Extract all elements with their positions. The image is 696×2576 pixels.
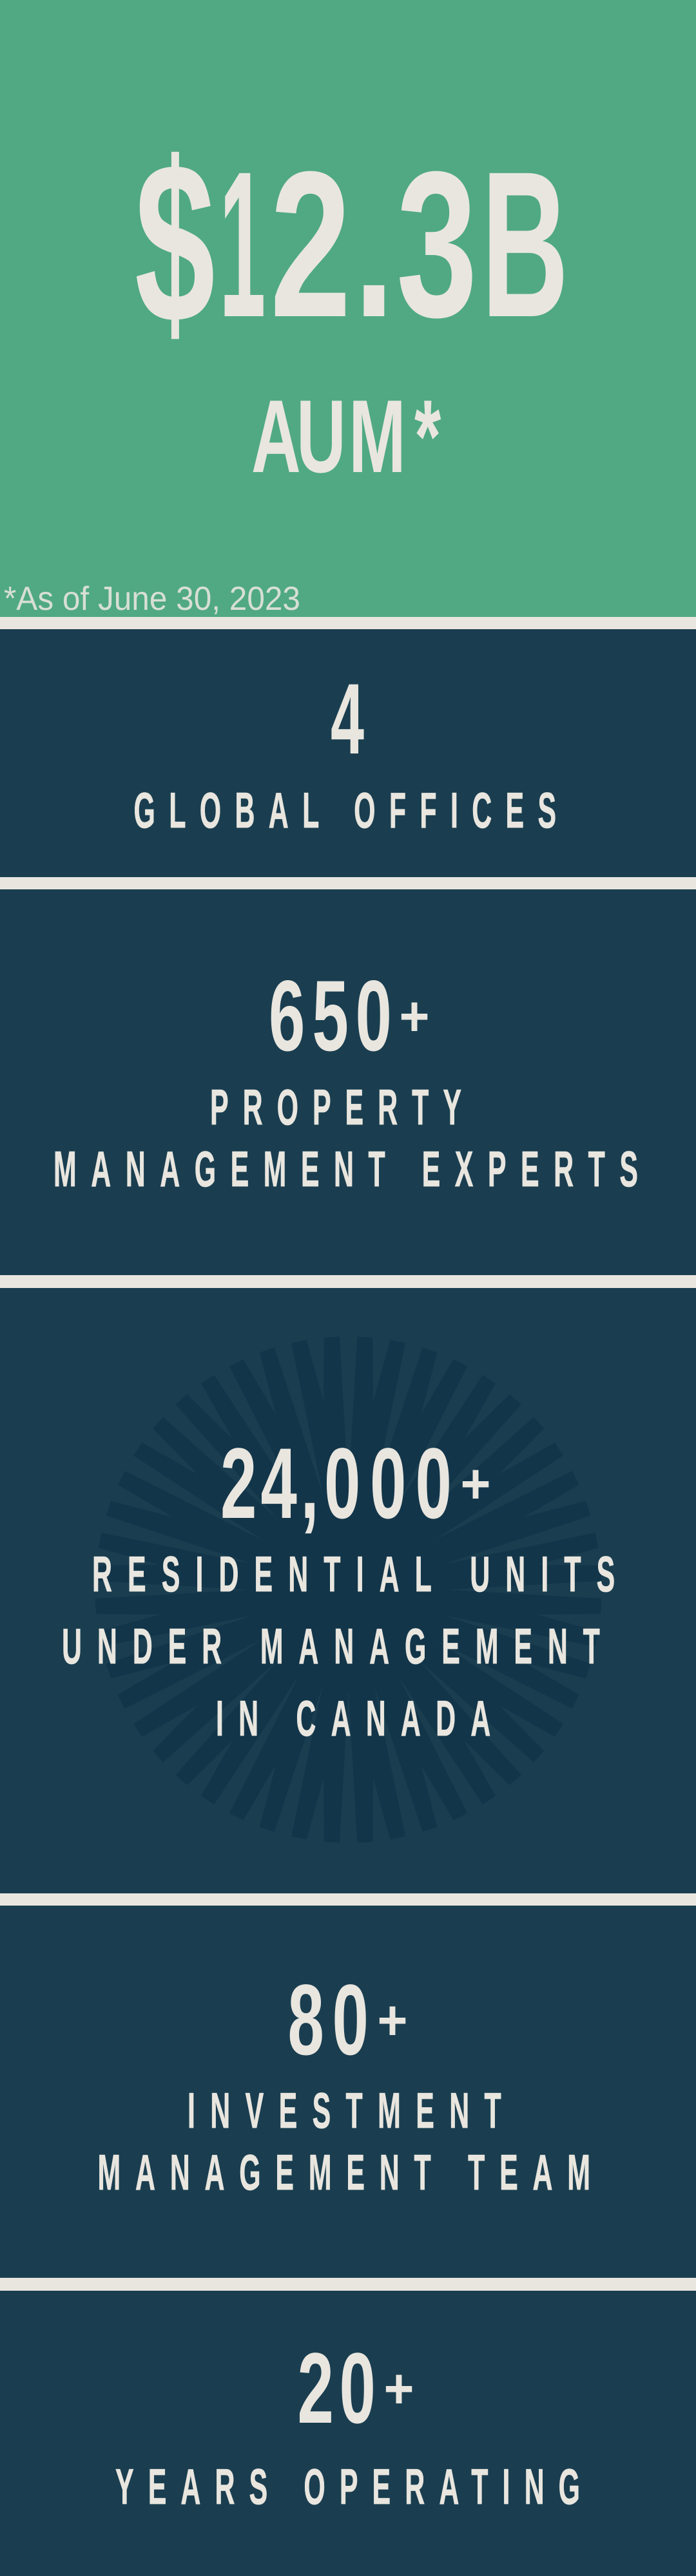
AUM label: AUM* bbox=[251, 379, 441, 494]
label: property management experts bbox=[53, 1080, 638, 1197]
headline figure: 1 bbox=[219, 128, 266, 361]
headline figure bbox=[135, 115, 568, 372]
figure: 20+ bbox=[298, 2332, 414, 2444]
panel: property management experts bbox=[0, 889, 696, 1275]
panel: global offices bbox=[0, 629, 696, 877]
label: residential units under management in Canada: IN CANADA bbox=[216, 1691, 490, 1747]
label: investment management team: MANAGEMENT TEAM bbox=[98, 2145, 590, 2201]
panel: investment management team bbox=[0, 1906, 696, 2278]
label: property management experts: PROPERTY bbox=[210, 1080, 461, 1135]
headline figure: B bbox=[481, 128, 568, 361]
footnote: *As of June 30, 2023 bbox=[4, 580, 300, 618]
panel: AUM bbox=[0, 0, 696, 618]
headline figure: 2.3 bbox=[270, 129, 478, 361]
icon: sunburst bbox=[94, 1336, 603, 1844]
label: investment management team: INVESTMENT bbox=[188, 2083, 501, 2139]
headline figure: $ bbox=[135, 115, 215, 372]
figure: 650+: + bbox=[400, 985, 429, 1048]
panel: years operating bbox=[0, 2291, 696, 2576]
label: residential units under management in Canada: RESIDENTIAL UNITS bbox=[92, 1547, 615, 1602]
figure: 4: 4 bbox=[331, 664, 364, 775]
figure: 80+ bbox=[287, 1964, 407, 2076]
figure: 80+: 80 bbox=[287, 1964, 369, 2076]
label: investment management team bbox=[98, 2083, 590, 2201]
figure: 20+: + bbox=[384, 2358, 414, 2420]
divider bands bbox=[0, 617, 696, 2291]
label: residential units under management in Canada bbox=[62, 1547, 615, 1747]
figure: 80+: + bbox=[378, 1989, 407, 2052]
label: residential units under management in Canada: UNDER MANAGEMENT bbox=[62, 1619, 600, 1674]
label: global offices: GLOBAL OFFICES bbox=[134, 783, 556, 838]
label: property management experts: MANAGEMENT EXPERTS bbox=[53, 1142, 638, 1197]
label: years operating: YEARS OPERATING bbox=[115, 2459, 580, 2515]
figure: 24,000+: 24,000 bbox=[220, 1427, 452, 1539]
figure: 650+: 650 bbox=[269, 960, 392, 1072]
figure: 20+: 20 bbox=[298, 2332, 376, 2444]
panel: residential units bbox=[0, 1288, 696, 1893]
figure: 24,000+: + bbox=[460, 1453, 491, 1515]
